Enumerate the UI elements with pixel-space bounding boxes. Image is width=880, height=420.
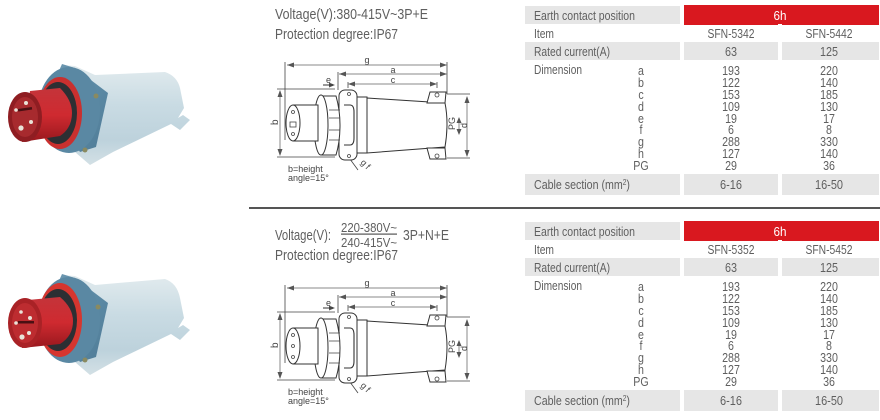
table rows: dimensions: 153 bbox=[722, 87, 740, 102]
dimension drawing, lower: g bbox=[359, 380, 369, 391]
table rows: dimensions: Dimension bbox=[534, 62, 582, 77]
dimension drawing, upper: b bbox=[270, 119, 281, 125]
table row: earth contact position: 6h bbox=[774, 8, 786, 23]
voltage and protection text, upper: Protection degree:IP67 bbox=[275, 27, 398, 43]
voltage and protection text, lower: 240-415V~ bbox=[341, 235, 397, 250]
table rows: dimensions: 29 bbox=[725, 158, 737, 173]
table rows: dimensions: 36 bbox=[823, 374, 835, 389]
table rows: dimensions: 36 bbox=[823, 158, 835, 173]
voltage and protection text, lower: 3P+N+E bbox=[403, 228, 449, 244]
voltage and protection text, upper bbox=[275, 7, 428, 43]
dimension drawing, upper: a bbox=[390, 65, 396, 75]
table rows: dimensions: 140 bbox=[820, 146, 838, 161]
dimension drawing, upper: b=height bbox=[288, 164, 323, 174]
table rows: dimensions: 193 bbox=[722, 279, 740, 294]
table rows: dimensions: 140 bbox=[820, 75, 838, 90]
table rows: dimensions: b bbox=[638, 75, 644, 90]
table row: cable section: Cable section (mm bbox=[534, 393, 623, 408]
table rows: dimensions: 17 bbox=[823, 327, 835, 342]
dimension drawing, lower: f bbox=[364, 385, 373, 395]
dimension drawing, upper: e bbox=[326, 75, 331, 85]
table rows: dimensions: 185 bbox=[820, 87, 838, 102]
table rows: dimensions: f bbox=[640, 338, 643, 353]
table rows: dimensions: d bbox=[638, 315, 644, 330]
table rows: dimensions: a bbox=[638, 63, 644, 78]
table row: earth contact position: 6h bbox=[774, 224, 786, 239]
dimension drawing, lower: a bbox=[390, 288, 396, 298]
table row: item: Item bbox=[534, 242, 554, 257]
table row: earth contact position: Earth contact position bbox=[534, 8, 635, 23]
dimension drawing, lower bbox=[270, 278, 470, 406]
table rows: dimensions: 127 bbox=[722, 146, 740, 161]
table row: rated current: 63 bbox=[725, 260, 737, 275]
dimension drawing, lower: e bbox=[326, 298, 331, 308]
table rows: dimensions: 140 bbox=[820, 362, 838, 377]
table row: rated current: 63 bbox=[725, 44, 737, 59]
table rows: dimensions: 193 bbox=[722, 63, 740, 78]
table row: earth contact position: Earth contact position bbox=[534, 224, 635, 239]
table rows: dimensions: b bbox=[638, 291, 644, 306]
specification table, upper bbox=[525, 5, 879, 195]
table rows: dimensions: 19 bbox=[725, 111, 737, 126]
table rows: dimensions: PG bbox=[633, 374, 649, 389]
dimension drawing, upper: PG bbox=[447, 117, 457, 130]
table row: item: SFN-5342 bbox=[708, 26, 754, 41]
voltage and protection text, lower: 220-380V~ bbox=[341, 220, 397, 235]
table row: cable section: 6-16 bbox=[720, 393, 742, 408]
table row: cable section: 2 bbox=[623, 177, 626, 187]
table row: rated current: 125 bbox=[820, 260, 838, 275]
table row: item bbox=[534, 242, 852, 257]
table rows: dimensions: 6 bbox=[728, 338, 734, 353]
table row: rated current: 125 bbox=[820, 44, 838, 59]
dimension drawing, lower: angle=15° bbox=[288, 396, 329, 406]
dimension drawing, lower: g bbox=[364, 278, 370, 288]
table row: item bbox=[534, 26, 852, 41]
table row: rated current: Rated current(A) bbox=[534, 260, 610, 275]
table row: rated current bbox=[525, 258, 879, 276]
product photo: 3P+E plug bbox=[8, 64, 190, 165]
table rows: dimensions: 330 bbox=[820, 350, 838, 365]
dimension drawing, upper: c bbox=[391, 75, 396, 85]
product photo: 3P+N+E plug bbox=[8, 274, 190, 375]
table row: cable section: ) bbox=[626, 177, 630, 192]
table rows: dimensions: 127 bbox=[722, 362, 740, 377]
table row: cable section bbox=[525, 390, 879, 411]
table rows: dimensions: g bbox=[638, 350, 644, 365]
table row: earth contact position bbox=[525, 221, 879, 241]
table row: cable section: 2 bbox=[623, 393, 626, 403]
table row: item: SFN-5352 bbox=[708, 242, 754, 257]
table rows: dimensions: 19 bbox=[725, 327, 737, 342]
table rows: dimensions: e bbox=[638, 327, 644, 342]
dimension drawing, upper: d bbox=[459, 123, 469, 128]
table rows: dimensions: a bbox=[638, 279, 644, 294]
table rows: dimensions: f bbox=[640, 122, 643, 137]
dimension drawing, lower: b bbox=[270, 342, 281, 348]
table rows: dimensions: 330 bbox=[820, 134, 838, 149]
table rows: dimensions: PG bbox=[633, 158, 649, 173]
dimension drawing, lower: PG bbox=[447, 340, 457, 353]
table rows: dimensions: 122 bbox=[722, 291, 740, 306]
table row: rated current: Rated current(A) bbox=[534, 44, 610, 59]
table rows: dimensions bbox=[534, 62, 838, 173]
voltage and protection text, upper: Voltage(V):380-415V~3P+E bbox=[275, 7, 428, 23]
table row: rated current bbox=[525, 42, 879, 60]
dimension drawing, lower: c bbox=[391, 298, 396, 308]
table rows: dimensions: 288 bbox=[722, 350, 740, 365]
specification table, lower bbox=[525, 221, 879, 411]
table rows: dimensions: 109 bbox=[722, 315, 740, 330]
dimension drawing, upper: g bbox=[359, 157, 369, 168]
table rows: dimensions: 17 bbox=[823, 111, 835, 126]
table row: cable section: ) bbox=[626, 393, 630, 408]
table row: cable section: 16-50 bbox=[815, 177, 843, 192]
table rows: dimensions: c bbox=[638, 87, 644, 102]
dimension drawing, lower: b=height bbox=[288, 387, 323, 397]
voltage and protection text, lower bbox=[275, 220, 449, 264]
table row: item: SFN-5442 bbox=[806, 26, 852, 41]
table rows: dimensions: 130 bbox=[820, 99, 838, 114]
table rows: dimensions: e bbox=[638, 111, 644, 126]
table rows: dimensions: 220 bbox=[820, 63, 838, 78]
table rows: dimensions: 29 bbox=[725, 374, 737, 389]
voltage and protection text, lower: Voltage(V): bbox=[275, 228, 331, 244]
table row: cable section: 6-16 bbox=[720, 177, 742, 192]
table rows: dimensions: 6 bbox=[728, 122, 734, 137]
table rows: dimensions: 8 bbox=[826, 122, 832, 137]
dimension drawing, upper: angle=15° bbox=[288, 173, 329, 183]
table rows: dimensions: Dimension bbox=[534, 278, 582, 293]
table rows: dimensions: 109 bbox=[722, 99, 740, 114]
dimension drawing, lower: d bbox=[459, 346, 469, 351]
voltage and protection text, lower: Protection degree:IP67 bbox=[275, 248, 398, 264]
table row: cable section: 16-50 bbox=[815, 393, 843, 408]
table rows: dimensions: 153 bbox=[722, 303, 740, 318]
table rows: dimensions: 122 bbox=[722, 75, 740, 90]
table rows: dimensions: 288 bbox=[722, 134, 740, 149]
table row: cable section bbox=[525, 174, 879, 195]
table rows: dimensions: h bbox=[638, 146, 644, 161]
table row: item: Item bbox=[534, 26, 554, 41]
table rows: dimensions: 220 bbox=[820, 279, 838, 294]
table row: earth contact position bbox=[525, 5, 879, 25]
dimension drawing, upper: g bbox=[364, 55, 370, 65]
table rows: dimensions: 8 bbox=[826, 338, 832, 353]
dimension drawing, upper bbox=[270, 55, 470, 183]
table rows: dimensions bbox=[534, 278, 838, 389]
table rows: dimensions: 140 bbox=[820, 291, 838, 306]
table rows: dimensions: c bbox=[638, 303, 644, 318]
table row: cable section: Cable section (mm bbox=[534, 177, 623, 192]
table rows: dimensions: g bbox=[638, 134, 644, 149]
table rows: dimensions: d bbox=[638, 99, 644, 114]
table rows: dimensions: 185 bbox=[820, 303, 838, 318]
table rows: dimensions: h bbox=[638, 362, 644, 377]
table row: item: SFN-5452 bbox=[806, 242, 852, 257]
dimension drawing, upper: f bbox=[364, 162, 373, 172]
table rows: dimensions: 130 bbox=[820, 315, 838, 330]
